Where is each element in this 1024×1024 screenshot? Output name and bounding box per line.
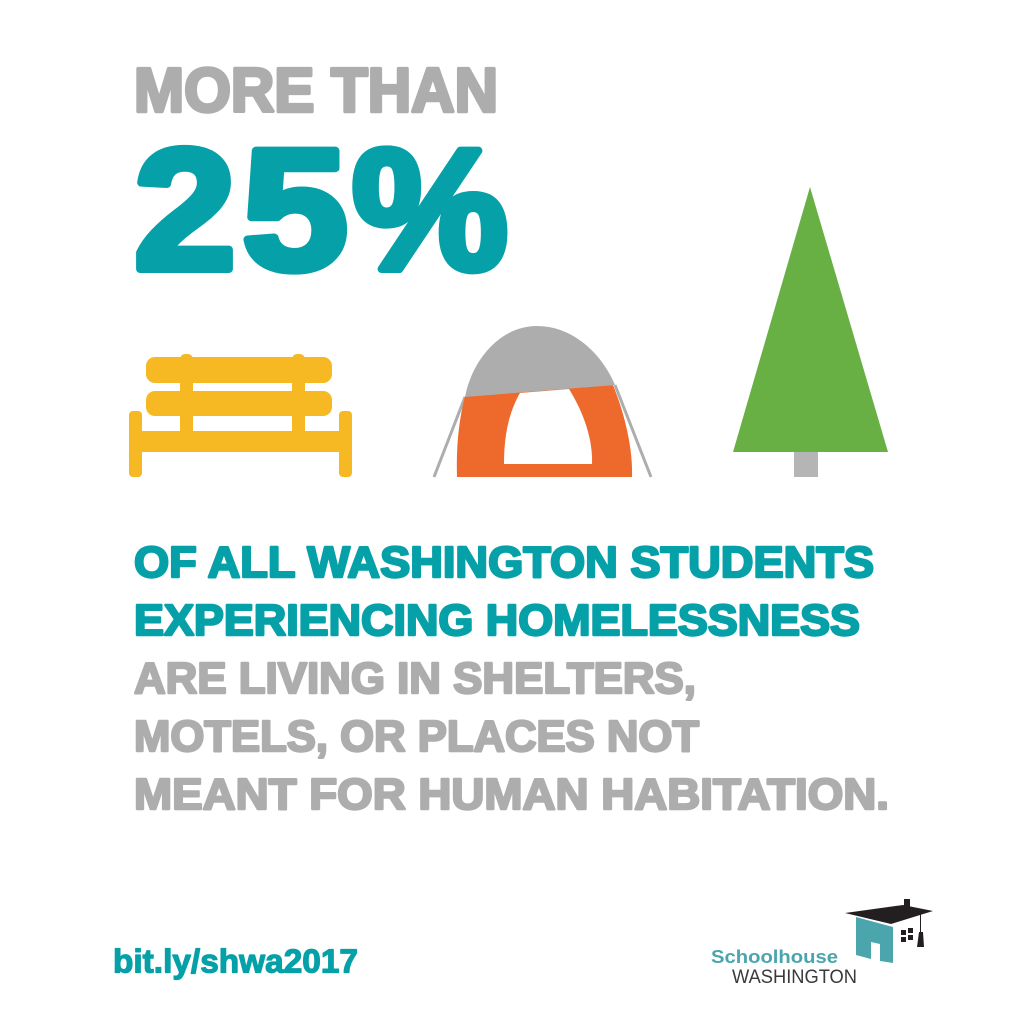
text block: gray statement: MOTELS, OR PLACES NOT <box>134 712 699 761</box>
big statistic: 25%: 2 <box>134 114 236 306</box>
icon: tree <box>733 187 888 477</box>
link: bit.ly/shwa2017: bit.ly/shwa2017 <box>113 942 358 980</box>
logo icon: house with graduation cap <box>845 899 933 963</box>
heading: more than: MORE THAN <box>134 56 498 125</box>
text block: teal statement: OF ALL WASHINGTON STUDENTS <box>134 538 874 587</box>
big statistic: 25%: % <box>352 114 508 306</box>
text block: teal statement: EXPERIENCING HOMELESSNESS <box>134 596 860 645</box>
icon: tent <box>434 326 651 477</box>
text block: gray statement: ARE LIVING IN SHELTERS, <box>134 654 696 703</box>
text block: gray statement: MEANT FOR HUMAN HABITATION. <box>134 770 889 819</box>
big statistic: 25% <box>134 114 508 306</box>
icon: bench <box>129 354 352 477</box>
text block: teal statement <box>134 538 874 645</box>
text block: gray statement <box>134 654 889 819</box>
logo wordmark: Washington: WASHINGTON <box>732 966 857 988</box>
logo wordmark: Schoolhouse: Schoolhouse <box>711 946 838 967</box>
big statistic: 25%: 5 <box>242 114 348 306</box>
logo: Schoolhouse Washington <box>711 899 933 988</box>
